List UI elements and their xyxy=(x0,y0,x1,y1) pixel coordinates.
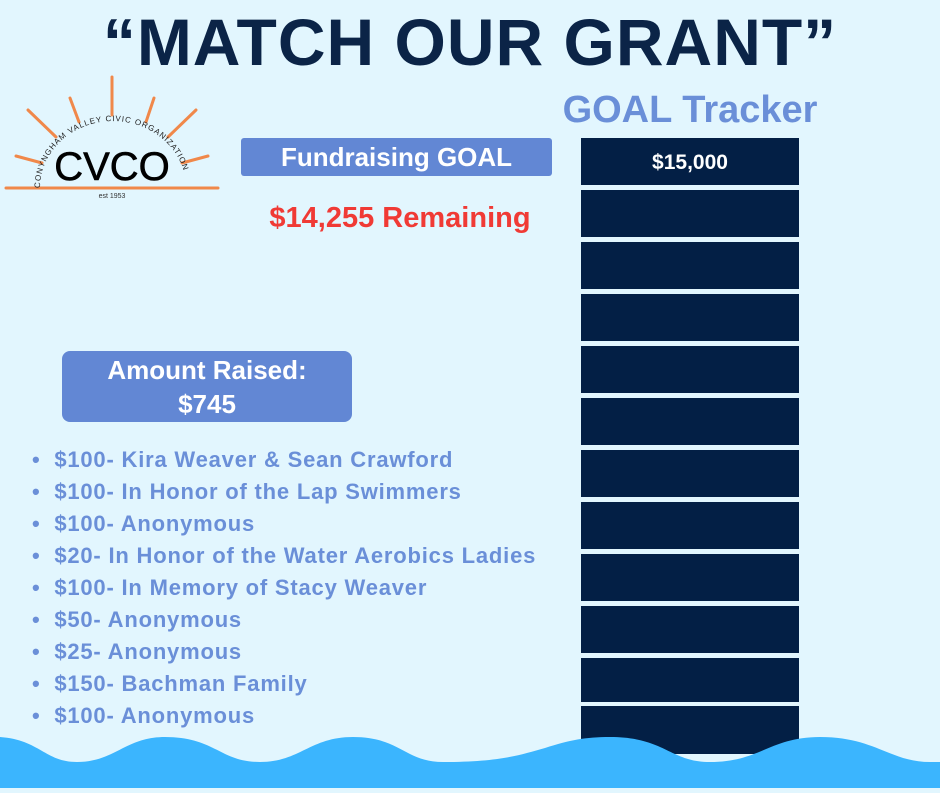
donor list: • $50- Anonymous xyxy=(32,607,242,632)
donor list: • $100- In Honor of the Lap Swimmers xyxy=(32,479,462,504)
amount raised box: $745 xyxy=(178,389,236,419)
donor list: • $100- Anonymous xyxy=(32,511,255,536)
fundraising goal label: Fundraising GOAL xyxy=(281,142,512,172)
donor list: • $100- Anonymous xyxy=(32,703,255,728)
amount raised box xyxy=(62,351,352,422)
donor list: • $100- In Memory of Stacy Weaver xyxy=(32,575,427,600)
heading: GOAL Tracker: GOAL Tracker xyxy=(563,89,817,131)
logo xyxy=(4,76,220,200)
remaining amount: $14,255 Remaining xyxy=(269,202,531,234)
donor list: • $25- Anonymous xyxy=(32,639,242,664)
fundraising goal label xyxy=(241,138,552,176)
title: “MATCH OUR GRANT” xyxy=(103,5,837,79)
donor list: • $150- Bachman Family xyxy=(32,671,308,696)
wave xyxy=(0,737,940,788)
logo: CVCO xyxy=(54,145,170,189)
donor list xyxy=(32,447,536,728)
logo: CONYNGHAM VALLEY CIVIC ORGANIZATION xyxy=(34,116,188,188)
goal tracker bar xyxy=(581,138,799,754)
donor list: • $20- In Honor of the Water Aerobics Ladies xyxy=(32,543,536,568)
goal tracker bar: $15,000 xyxy=(652,151,728,174)
logo: est 1953 xyxy=(99,193,126,200)
donor list: • $100- Kira Weaver & Sean Crawford xyxy=(32,447,453,472)
amount raised box: Amount Raised: xyxy=(107,355,307,385)
